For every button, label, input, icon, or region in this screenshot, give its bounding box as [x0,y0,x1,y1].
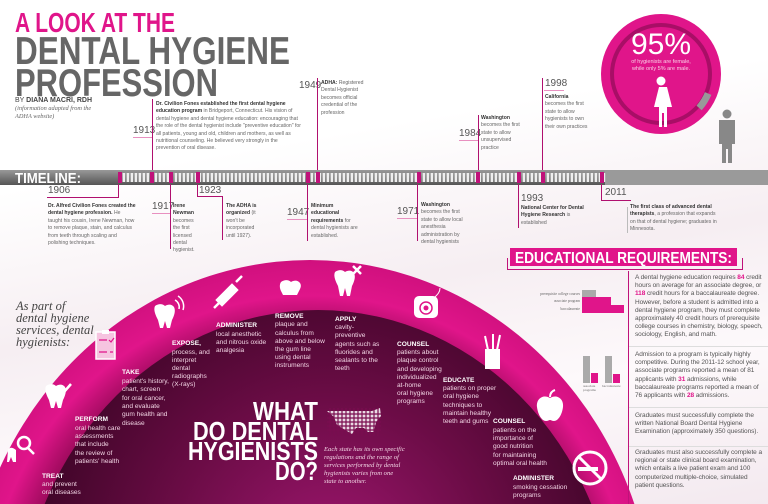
activity labels: teeth [335,365,350,372]
arc panel: what do dental hygienists do [0,260,634,504]
activity labels: local anesthetic [216,331,262,338]
activity labels: that include [75,441,109,448]
timeline event 1923: 1923 [199,185,221,196]
activity labels: preventive [335,332,366,339]
timeline event 1913: 1913 [133,125,155,136]
activity labels: patients on the [493,427,537,434]
activity labels: importance of [493,435,533,442]
activity labels: patient's history, [122,378,169,385]
timeline event 1993 [518,184,584,228]
timeline event 1949: 1949 [299,80,321,91]
chart: applicants vs admissions [583,356,621,392]
activity labels: (X-rays) [172,381,195,388]
activity labels: for maintaining [493,452,537,459]
note text: Each state has its own specific [323,446,405,453]
intro text: services, dental [16,323,94,337]
icon: no smoking [574,452,606,484]
activity labels: for oral cancer, [122,395,166,402]
icon: toothbrush cup [485,334,500,369]
activity labels: gum health and [122,411,168,418]
activity labels: COUNSEL [493,418,525,425]
activity labels: the gum line [275,346,311,353]
heading: what do dental hygienists do: HYGIENISTS [188,436,318,466]
timeline event 1949: ADHA: Registered Dental Hygienist becomes official credential of the profession [321,80,363,116]
activity labels: sealants to the [335,357,378,364]
activity labels: patients about [397,349,439,356]
activity labels: smoking cessation [513,484,568,491]
stat circle 95% female: 95% [631,28,691,61]
timeline event 1971 [397,184,463,245]
timeline event 1949 [299,78,364,170]
icon: syringe [214,276,242,308]
heading: what do dental hygienists do: DO DENTAL [193,416,318,446]
timeline event 1923 [197,184,256,240]
intro text: As part of [15,299,67,313]
heading: what do dental hygienists do: DO? [275,456,318,486]
icon: tooth check [45,384,71,408]
activity labels: individualized [397,374,437,381]
heading: what do dental hygienists do [188,396,318,486]
timeline event 1971: 1971 [397,206,419,217]
icon: tooth [280,280,301,295]
icon: male [719,110,735,163]
activity labels: EDUCATE [443,377,475,384]
activity labels: ADMINISTER [216,322,257,329]
timeline event 1998: California becomes the first state to allow hygienists to own their own practices [545,94,587,130]
activity labels: oral hygiene [443,393,479,400]
chart: applicants vs admissions: associate [583,384,596,388]
stat circle 95% female: of hygienists are female, [631,59,691,65]
timeline event 1993: 1993 [521,193,543,204]
timeline event 1906: Dr. Alfred Civilion Fones created the dental hygiene profession. He taught his cousin, Irene Newman, how to remove plaque, stain, and calculus from teeth through scaling and polishing techniques. [48,203,136,246]
activity labels: oral diseases [42,489,82,496]
activity labels: TREAT [42,473,64,480]
timeline event 2011 [601,184,717,233]
activity labels: cavity- [335,324,354,331]
activity labels: TAKE [122,369,140,376]
panel: education text rows [628,271,768,504]
intro text: hygienists: [16,335,70,349]
activity labels [42,313,568,499]
activity labels: chart, screen [122,386,160,393]
activity labels: patients' health [75,458,119,465]
chart: credit hours bars [540,290,624,313]
timeline event 1984: 1984 [459,128,481,139]
activity labels: and prevent [42,481,77,488]
title [15,8,290,98]
activity labels: assessments [75,433,114,440]
note text: services performed by dental [324,462,401,469]
activity labels: and nitrous oxide [216,339,267,346]
activity labels: agents such as [335,341,380,348]
icon: x-ray tooth [154,296,184,328]
activity labels: plaque and [275,321,308,328]
icon: clipboard [96,330,115,359]
activity labels: good nutrition [493,443,533,450]
activity labels: optimal oral health [493,460,547,467]
activity labels: and developing [397,366,442,373]
chart: applicants vs admissions: baccalaureate [602,384,621,388]
activity labels: dental [172,365,191,372]
icon: floss [414,288,440,318]
timeline event 1947: 1947 [287,207,309,218]
chart: credit hours bars: associate program [554,299,580,303]
activity labels: oral health care [75,425,121,432]
timeline bar [0,170,768,185]
icon: apple [537,390,563,421]
activity labels: process, and [172,349,210,356]
timeline event 2011: The first class of advanced dental therapists, a profession that expands on that of dental hygiene; graduates in Minnesota. [630,204,717,232]
timeline event 1993: National Center for Dental Hygiene Research is established [521,205,584,226]
stat circle 95% female [601,14,735,163]
activity labels: REMOVE [275,313,304,320]
timeline event 1971: Washington becomes the first state to allow local anesthesia administration by dental hygienists [421,202,463,245]
heading: what do dental hygienists do: WHAT [253,396,318,426]
activity labels: patients on proper [443,385,497,392]
timeline event 1906 [47,184,136,246]
chart: applicants vs admissions: programs [583,388,596,392]
activity labels: the review of [75,450,113,457]
intro text [15,299,94,349]
chart: credit hours bars: baccalaureate [560,307,580,311]
timeline event 1984: Washington becomes the first state to allow unsupervised practice [481,115,520,151]
note text: regulations and the range of [324,454,400,461]
activity labels: techniques to [443,402,483,409]
activity labels: ADMINISTER [513,475,554,482]
byline [14,97,92,120]
activity labels: PERFORM [75,416,108,423]
timeline event 1917: 1917 [152,201,174,212]
timeline event 2011: 2011 [605,187,627,198]
icon: female [654,76,672,127]
note text [323,446,405,485]
timeline event 1913 [133,99,301,170]
timeline event 1998 [542,78,588,170]
icon: magnifier tooth [7,437,34,462]
intro text: dental hygiene [16,311,90,325]
panel: education text rows: A dental hygiene education requires 84 credit hours on average for an associate degree, or 118 credit hours for a baccalaureate degree. However, before a student is admitted into a dental hygiene program, they must complete approximately 40 credit hours of prerequisite college courses in chemistry, biology, speech, sociology, English, and math. [635,274,763,338]
timeline event 1998: 1998 [545,78,567,89]
timeline event 1923: The ADHA is organized (it won't be incorporated until 1927). [226,203,256,239]
activity labels: oral hygiene [397,390,433,397]
byline: (information adapted from the ADHA website) [15,105,91,120]
icon: tooth with x [334,266,361,296]
activity labels: maintain healthy [443,410,492,417]
stat circle 95% female: while only 5% are male. [631,66,691,72]
activity labels: using dental [275,354,311,361]
activity labels: teeth and gums [443,418,489,425]
note text: state to another. [324,478,367,485]
panel: education text rows: Admission to a program is typically highly competitive. During the 2011-12 school year, associate programs reported a mean of 81 applicants with 31 admissions, while baccalaureate programs reported a mean of 76 applicants with 28 admissions. [635,351,760,399]
timeline event 1984 [459,115,520,170]
activity labels: above and below [275,338,325,345]
activity labels: at-home [397,382,422,389]
activity labels: fluorides and [335,349,373,356]
panel: education text rows: Graduates must successfully complete the written National Board Dental Hygiene Examination (approximately 350 questions). [635,412,758,435]
activity labels: COUNSEL [397,341,429,348]
activity labels: interpret [172,357,196,364]
icon: US map [327,408,381,436]
byline: BY DIANA MACRI, RDH [15,97,92,104]
panel: education text rows: Graduates must also successfully complete a regional or state clinical board examination, which entails a live patient exam and 100 computerized multiple-choice, simulated patient questions. [635,449,762,489]
timeline event 1917 [152,184,195,253]
activity labels: radiographs [172,373,208,380]
timeline event 1913: Dr. Civilion Fones established the first dental hygiene education program in Bridgeport, Connecticut. His vision of dental hygiene and dental hygiene education: encouraging that the role of the dental hygienist include "preventive education" for all patients, young and old, children and mothers, as well as nutritional counseling. He believed very strongly in the prevention of oral disease. [156,101,301,151]
activity labels: EXPOSE, [172,340,201,347]
timeline event 1947 [287,184,358,241]
note text: hygienists varies from one [324,470,393,477]
activity labels: and evaluate [122,403,160,410]
timeline event 1906: 1906 [48,185,70,196]
activity labels: plaque control [397,357,439,364]
timeline event 1917: Irene Newman becomes the first licensed dental hygienist. [173,203,195,253]
activity labels: programs [397,398,426,405]
activity labels: APPLY [335,316,357,323]
timeline event 1947: Minimum educational requirements for dental hygienists are established. [311,203,358,239]
activity labels: programs [513,492,542,499]
activity labels: disease [122,420,145,427]
activity labels: calculus from [275,330,314,337]
activity labels: instruments [275,362,310,369]
chart: credit hours bars: prerequisite college courses [540,292,581,296]
heading: educational requirements [507,248,743,270]
activity labels: analgesia [216,347,245,354]
